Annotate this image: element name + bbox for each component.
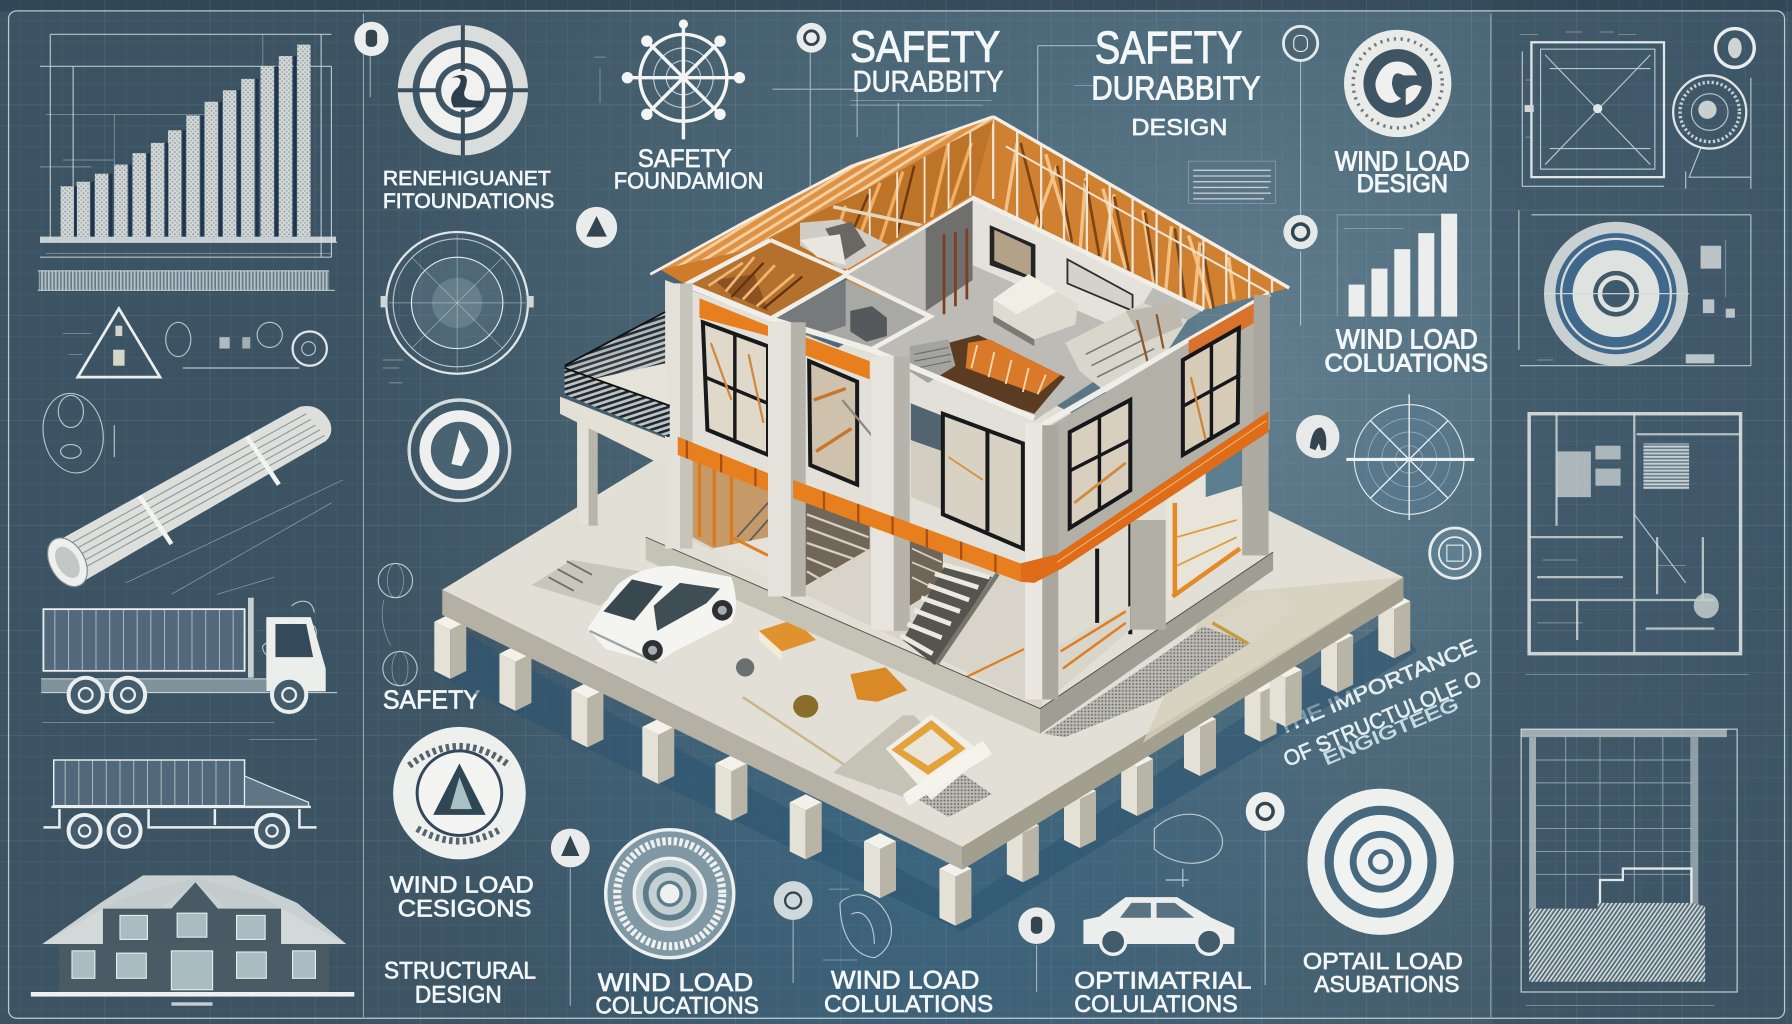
optimal load label: ASUBATIONS [1314, 971, 1459, 997]
wind load design label: WIND LOAD [1335, 145, 1470, 176]
renewable foundations label: RENEHIGUANET [383, 167, 551, 190]
foundation slab [442, 320, 1403, 870]
wind load calculations labels: COLUCATIONS [595, 993, 759, 1020]
balcony [560, 312, 670, 469]
wind load designs label [390, 872, 534, 923]
right wall upper floor [1051, 294, 1270, 566]
living room floor [846, 198, 1203, 421]
wind load calculations label: COLUATIONS [1325, 349, 1488, 377]
exposed floor framing [910, 335, 1065, 414]
heading: safety durability left: SAFETY [850, 24, 1000, 72]
roof gable framing [770, 121, 993, 273]
wind load designs label: CESIGONS [398, 896, 531, 923]
rotated importance heading: OF STRUCTULOLE O [1280, 666, 1485, 772]
safety foundation label: SAFETY [638, 145, 732, 173]
blueprint compass circle [381, 232, 534, 383]
exterior stairs [901, 563, 998, 665]
orange floor band [678, 411, 1269, 583]
service pit [833, 714, 992, 806]
ground floor interior [686, 446, 1242, 709]
car outline [1083, 897, 1234, 954]
structural design label [384, 957, 536, 1008]
helmet sketch [37, 389, 114, 478]
annotation note [1189, 161, 1275, 203]
blueprint: section with hatch [1521, 729, 1737, 1006]
rotated importance heading: THE IMPORTANCE [1274, 635, 1480, 739]
bar chart blueprint: top left [40, 34, 337, 257]
structural design label: STRUCTURAL [384, 957, 536, 984]
optimal load label: OPTAIL LOAD [1303, 948, 1463, 974]
rotated importance heading: ENGIGTEEG [1320, 693, 1462, 769]
safety foundation label [614, 145, 763, 194]
engine sketch [1154, 814, 1223, 887]
optimal material label: OPTIMATRIAL [1074, 968, 1251, 995]
left wall upper floor [665, 280, 1024, 566]
renewable foundations label: FITOUNDATIONS [383, 188, 554, 213]
heading: safety durability design right: SAFETY [1095, 22, 1242, 73]
wheel badge [622, 19, 745, 139]
target badge [398, 25, 528, 155]
torn wall debris [1065, 303, 1187, 394]
wind load design label: DESIGN [1357, 170, 1448, 198]
bottom right target badge [1307, 789, 1454, 935]
rolled blueprint [39, 406, 343, 594]
wind load designs label: WIND LOAD [390, 872, 534, 898]
small outline badge right [1430, 528, 1480, 578]
attic storage grey room [800, 219, 901, 270]
blueprint: concentric circle plan [1519, 210, 1751, 366]
leader lines [370, 46, 1301, 326]
heading: safety durability left [850, 24, 1004, 105]
renewable foundations label [383, 167, 554, 213]
attic room left [686, 240, 846, 319]
blueprint: square plan [1520, 32, 1664, 186]
ground shadow [434, 617, 1417, 931]
wind load calculations labels center [824, 967, 993, 1018]
bottom spiral badge [606, 830, 734, 958]
heading: safety durability design right [1091, 22, 1261, 140]
heading: safety durability design right: DURABBITY [1091, 70, 1261, 107]
triangle badge [393, 727, 526, 859]
wind load calculations labels: WIND LOAD [598, 969, 753, 997]
roof rafters plane [973, 117, 1289, 310]
small room [770, 279, 930, 350]
building plinth [646, 537, 1273, 734]
bar chart: wind load [1337, 214, 1457, 317]
roof shingle plane [650, 117, 993, 274]
foundation pillars [434, 593, 1410, 926]
heading: safety durability design right: DESIGN [1131, 114, 1227, 140]
pin badges [354, 22, 1339, 1006]
optimal material label: COLULATIONS [1074, 991, 1238, 1018]
hatched ground zones [851, 626, 1250, 817]
scribble annotations near roll [177, 601, 316, 658]
wind load calculations label [1325, 324, 1488, 377]
heading: safety durability left: DURABBITY [853, 65, 1004, 98]
fan sketch [823, 889, 891, 960]
roof eave orange band [661, 217, 808, 285]
wind load calculations label: WIND LOAD [1336, 324, 1478, 355]
safety foundation label: FOUNDAMION [614, 168, 763, 194]
safety label: SAFETY [383, 685, 480, 715]
wind load design label [1335, 145, 1470, 198]
parked white car [587, 566, 736, 663]
truck 2 [43, 760, 317, 847]
warning triangle sketch [63, 309, 160, 377]
blueprint: floor plan [1526, 414, 1749, 674]
concrete columns [577, 283, 1270, 699]
wind rose [1346, 394, 1474, 520]
wind load calculations labels center: COLULATIONS [824, 991, 993, 1018]
wind load calculations labels center: WIND LOAD [831, 967, 979, 995]
slab materials [531, 560, 1297, 789]
small globe sketches [378, 563, 417, 686]
hatched beam strip [38, 271, 335, 290]
wind load calculations labels [595, 969, 759, 1020]
rotated importance heading [1268, 635, 1497, 783]
structural design label: DESIGN [415, 981, 502, 1008]
wind load design badge [1344, 30, 1451, 137]
truck 1 [41, 598, 337, 739]
sofa [993, 274, 1078, 346]
blueprint: top right rings [1673, 29, 1754, 189]
wall rims [686, 195, 1270, 425]
ring badge [409, 400, 510, 501]
optimal load label [1303, 948, 1463, 997]
house elevation [31, 875, 354, 1006]
small sketch symbols row [166, 322, 327, 368]
optimal material label [1074, 968, 1251, 1018]
